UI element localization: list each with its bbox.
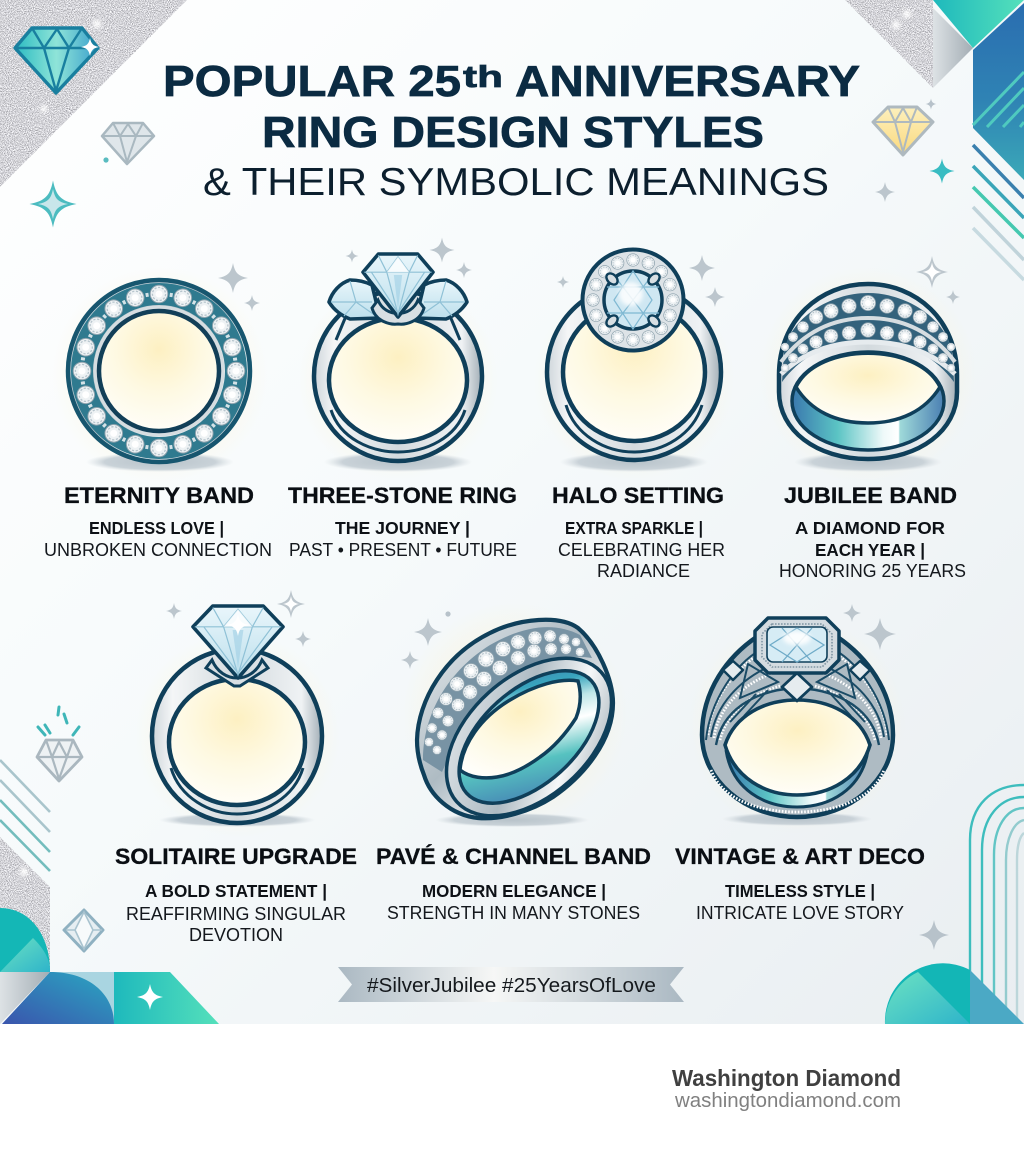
meaning: eternity band: UNBROKEN CONNECTION xyxy=(44,540,272,560)
icon: rhombus gem xyxy=(64,910,103,951)
footer: brand: Washington Diamond xyxy=(672,1065,901,1091)
meaning: eternity band: ENDLESS LOVE | xyxy=(89,518,224,538)
decoration: top-left silver glitter corner xyxy=(0,0,187,187)
panel: jubilee band xyxy=(760,256,976,581)
meaning: eternity band xyxy=(44,518,272,560)
panel: eternity band xyxy=(44,263,272,560)
panel: solitaire upgrade xyxy=(115,590,357,945)
icon: teal diamond xyxy=(15,28,99,93)
heading: pave and channel band: PAVÉ & CHANNEL BAND xyxy=(376,844,651,869)
meaning: vintage and art deco xyxy=(696,881,904,923)
meaning: three-stone ring xyxy=(289,518,517,560)
heading: jubilee band: JUBILEE BAND xyxy=(784,483,957,508)
meaning: three-stone ring: PAST • PRESENT • FUTURE xyxy=(289,540,517,560)
meaning: solitaire upgrade: REAFFIRMING SINGULAR xyxy=(126,904,346,924)
decoration: bottom-left corner shapes xyxy=(0,760,219,1024)
title: & THEIR SYMBOLIC MEANINGS xyxy=(203,161,829,204)
icon: yellow diamond xyxy=(873,107,933,155)
icon: grey diamond with dot xyxy=(102,123,154,164)
meaning: halo setting: EXTRA SPARKLE | xyxy=(565,518,703,538)
meaning: vintage and art deco: TIMELESS STYLE | xyxy=(725,881,875,901)
icon: grey sparkle bottom right xyxy=(919,920,949,950)
heading: halo setting: HALO SETTING xyxy=(552,483,724,508)
icon: teal sparkle xyxy=(30,180,76,228)
meaning: jubilee band xyxy=(779,518,966,581)
meaning: halo setting xyxy=(558,518,725,581)
ring: vintage art deco xyxy=(689,604,905,833)
meaning: halo setting: RADIANCE xyxy=(597,561,690,581)
title xyxy=(163,57,860,204)
meaning: jubilee band: A DIAMOND FOR xyxy=(795,518,945,538)
title: POPULAR 25 xyxy=(163,57,461,106)
ring: solitaire xyxy=(135,590,339,837)
meaning: jubilee band: EACH YEAR | xyxy=(815,540,925,560)
heading: eternity band: ETERNITY BAND xyxy=(64,483,254,508)
meaning: pave and channel band: MODERN ELEGANCE | xyxy=(422,881,606,901)
ring: pave band xyxy=(401,603,641,846)
footer: brand: washingtondiamond.com xyxy=(674,1090,901,1112)
decoration: bottom-right arches and shapes xyxy=(885,785,1024,1024)
icon: grey diamond with teal rays xyxy=(37,707,82,781)
heading: solitaire upgrade: SOLITAIRE UPGRADE xyxy=(115,844,357,869)
meaning: three-stone ring: THE JOURNEY | xyxy=(335,518,470,538)
meaning: pave and channel band: STRENGTH IN MANY STONES xyxy=(387,903,640,923)
meaning: solitaire upgrade xyxy=(126,881,346,945)
meaning: solitaire upgrade: A BOLD STATEMENT | xyxy=(145,881,327,901)
meaning: pave and channel band xyxy=(387,881,640,923)
ring: jubilee band xyxy=(760,256,976,483)
footer: brand xyxy=(672,1065,901,1112)
title: ANNIVERSARY xyxy=(515,57,860,106)
banner: hashtags xyxy=(338,967,684,1002)
meaning: solitaire upgrade: DEVOTION xyxy=(189,925,283,945)
decoration: top-right corner shapes xyxy=(845,0,1024,280)
heading: vintage and art deco: VINTAGE & ART DECO xyxy=(675,844,925,869)
banner: hashtags: #SilverJubilee #25YearsOfLove xyxy=(367,975,656,997)
meaning: jubilee band: HONORING 25 YEARS xyxy=(779,561,966,581)
panel: pave and channel band xyxy=(376,603,651,923)
panel: three-stone ring xyxy=(288,238,517,560)
ring: three-stone xyxy=(298,238,498,480)
title: RING DESIGN STYLES xyxy=(262,108,764,157)
ring: eternity band xyxy=(52,263,268,483)
title: th xyxy=(463,59,503,94)
icon: white sparkle xyxy=(137,984,163,1010)
panel: vintage and art deco xyxy=(675,604,925,923)
meaning: halo setting: CELEBRATING HER xyxy=(558,540,725,560)
meaning: vintage and art deco: INTRICATE LOVE STORY xyxy=(696,903,904,923)
icon: top-right sparkles xyxy=(875,98,954,202)
ring: halo xyxy=(534,250,734,480)
panel: halo setting xyxy=(534,250,734,581)
heading: three-stone ring: THREE-STONE RING xyxy=(288,483,517,508)
